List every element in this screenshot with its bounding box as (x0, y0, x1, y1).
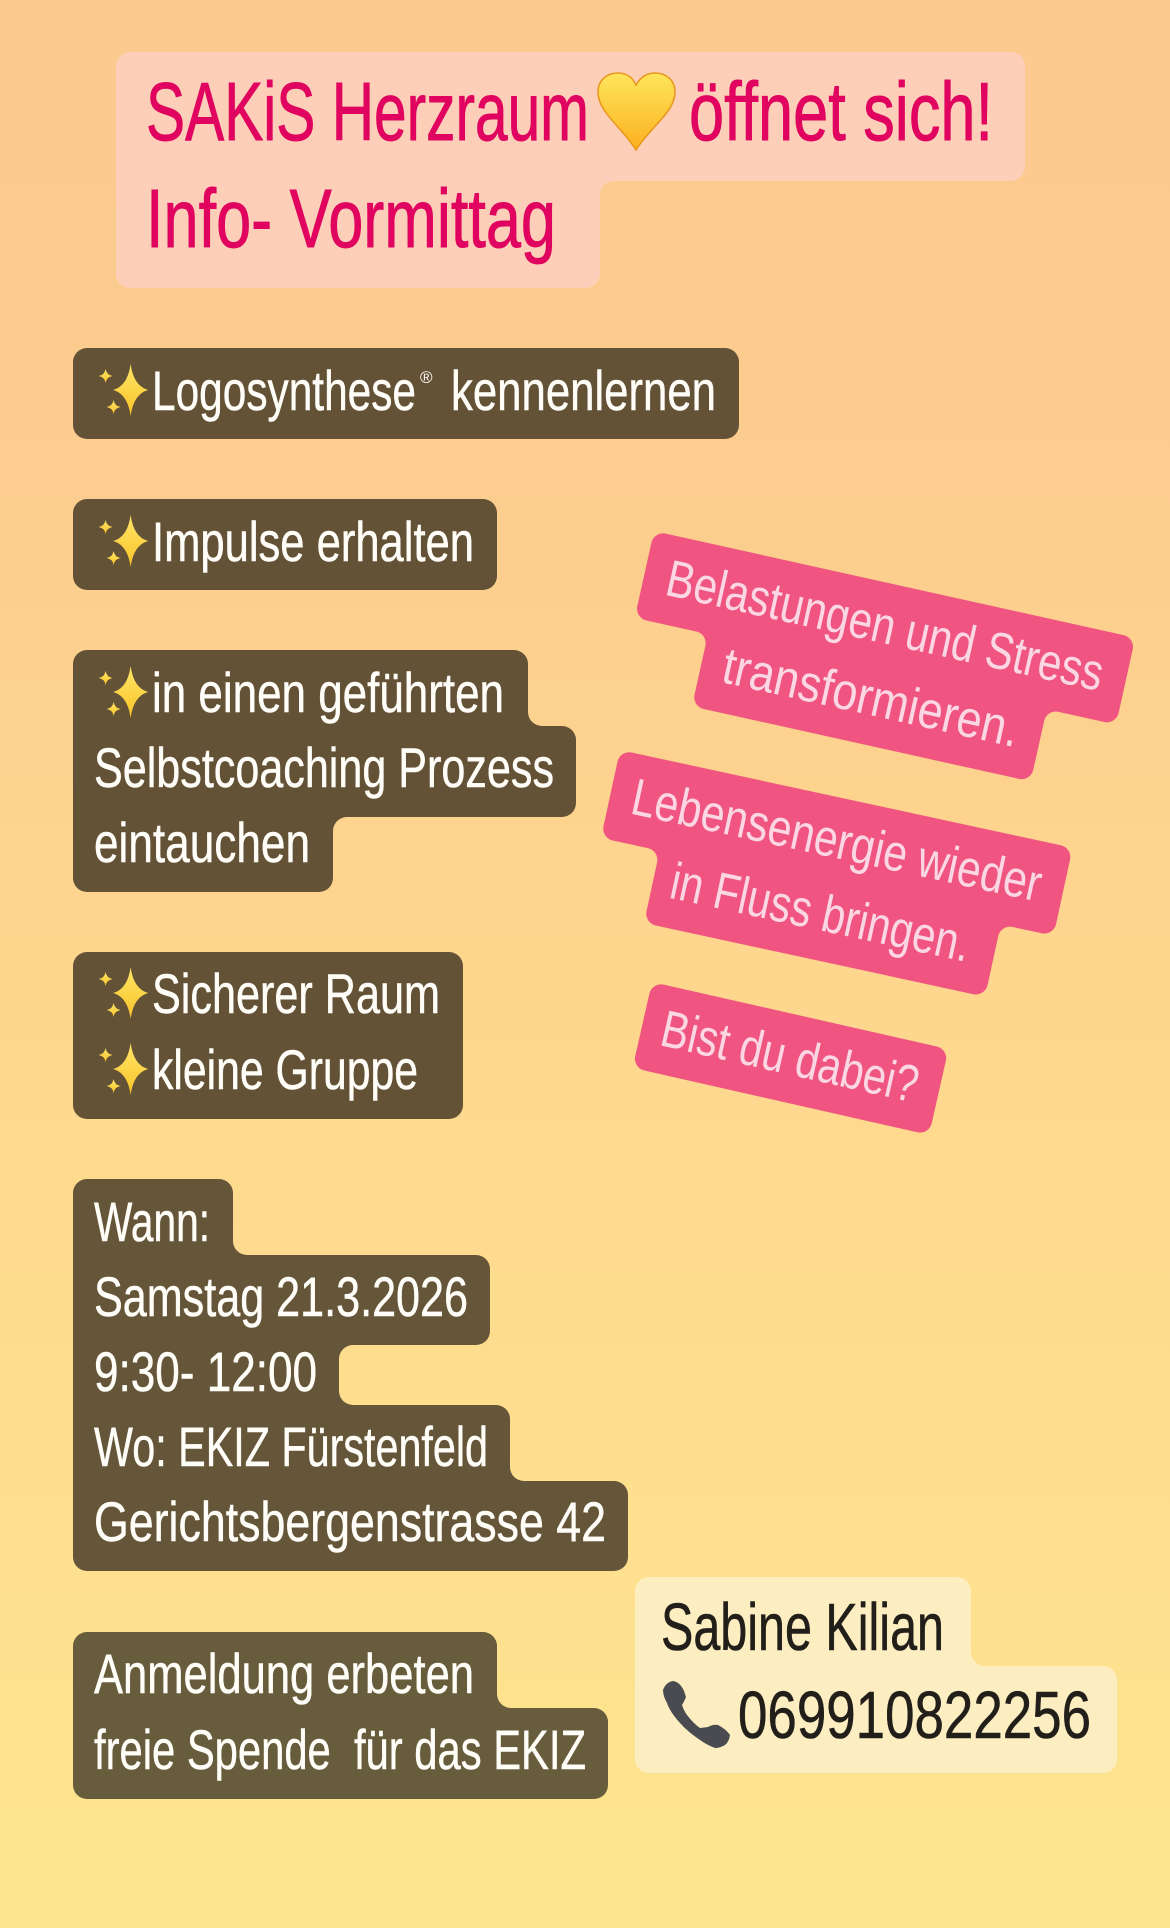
sticker: Lebensenergie (585, 750, 1073, 1008)
icon: sparkles (99, 666, 148, 718)
icon: sparkles (99, 364, 148, 416)
text: Sicherer Raum: Sicherer Raum (152, 962, 440, 1025)
panel: title (116, 52, 1025, 288)
panel: Logosynthese (73, 348, 739, 439)
text: time: 9:30- 12:00 (94, 1340, 317, 1403)
text: place: Wo: EKIZ Fürstenfeld (94, 1415, 488, 1478)
icon: telephone (663, 1681, 730, 1748)
text: line two: Selbstcoaching Prozess (94, 736, 554, 799)
text: registered mark: ® (420, 368, 433, 387)
text: date: Samstag 21.3.2026 (94, 1265, 468, 1328)
panel: registration (73, 1632, 608, 1799)
text: kleine Gruppe: kleine Gruppe (152, 1038, 418, 1101)
icon: sparkles (99, 967, 148, 1019)
title text: line one right: öffnet sich! (689, 65, 993, 158)
text: second line: in Fluss bringen. (665, 852, 976, 974)
icon: yellow heart (598, 73, 675, 150)
text: kennenlernen: kennenlernen (451, 359, 716, 422)
icon: sparkles (99, 1043, 148, 1095)
sticker: Bist du dabei (633, 982, 949, 1135)
text: first line: Lebensenergie wieder (626, 768, 1047, 913)
panel: contact (635, 1577, 1117, 1773)
sticker: Belastungen und Stress (619, 531, 1135, 797)
panel: date and place (73, 1179, 628, 1571)
text: line three: eintauchen (94, 811, 310, 874)
text: street: Gerichtsbergenstrasse 42 (94, 1490, 606, 1553)
text: freie Spende: freie Spende für das EKIZ (94, 1718, 586, 1781)
text: line one: in einen geführten (152, 661, 504, 724)
panel: Impulse erhalten (73, 499, 497, 590)
panel: Sicherer Raum (73, 952, 463, 1119)
title text: line two: Info- Vormittag (146, 172, 556, 265)
text: Wann: Wann: (94, 1190, 210, 1253)
icon: sparkles (99, 515, 148, 567)
panel: Selbstcoaching (73, 650, 576, 892)
text: Impulse erhalten: Impulse erhalten (152, 510, 474, 573)
text: name: Sabine Kilian (661, 1590, 944, 1665)
text: second line: transformieren. (717, 637, 1025, 759)
text: Anmeldung erbeten: Anmeldung erbeten (94, 1642, 474, 1705)
title text: line one left: SAKiS Herzraum (146, 65, 589, 158)
text: Logosynthese: Logosynthese (152, 359, 416, 422)
text: question: Bist du dabei? (656, 1000, 924, 1114)
